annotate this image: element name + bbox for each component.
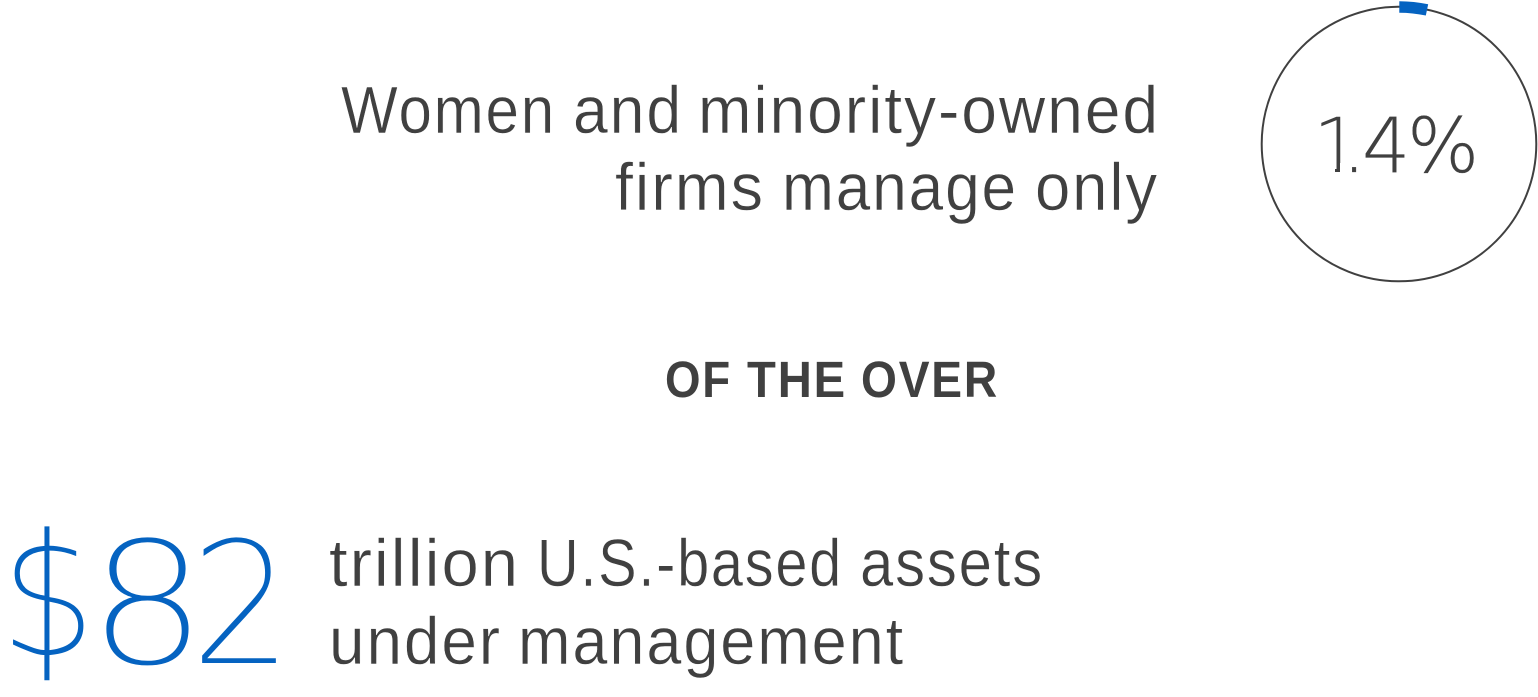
description: trillion U.S.-based assets under management: management — [518, 604, 905, 679]
heading: women and minority-owned firms manage only: manage — [782, 150, 1018, 225]
connector text: of the over: THE — [747, 351, 847, 408]
connector text: of the over — [665, 351, 999, 408]
donut value: .4% — [1342, 101, 1479, 190]
description: trillion U.S.-based assets under management — [329, 526, 1044, 679]
description: trillion U.S.-based assets under management: under — [329, 604, 502, 679]
heading: women and minority-owned firms manage only: and — [573, 73, 683, 148]
heading: women and minority-owned firms manage only: firms — [615, 150, 765, 225]
heading: women and minority-owned firms manage only: only — [1035, 150, 1159, 225]
heading: women and minority-owned firms manage only — [341, 73, 1160, 225]
donut chart: 1.4% — [1262, 7, 1536, 281]
big number: $82 — [0, 496, 293, 697]
description: trillion U.S.-based assets under management: U.S.-based — [537, 526, 843, 601]
heading: women and minority-owned firms manage only: Women — [341, 73, 556, 148]
donut chart: 1.4%: 1 — [1313, 101, 1361, 190]
heading: women and minority-owned firms manage only: minority-owned — [698, 73, 1160, 148]
connector text: of the over: OVER — [861, 351, 999, 408]
big number: $82: $ — [0, 496, 96, 697]
description: trillion U.S.-based assets under management: trillion — [329, 526, 520, 601]
connector text: of the over: OF — [665, 351, 732, 408]
description: trillion U.S.-based assets under management: assets — [860, 526, 1044, 601]
